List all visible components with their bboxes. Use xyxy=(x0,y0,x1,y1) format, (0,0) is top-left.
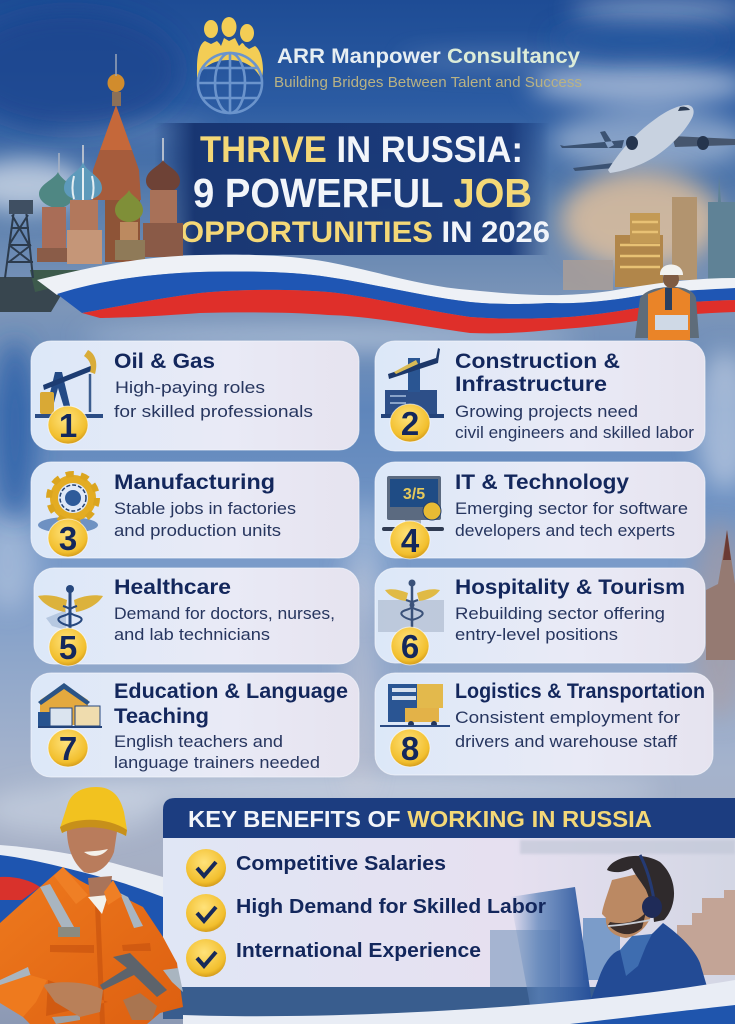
hard hat xyxy=(60,787,127,836)
description: Emerging sector for software xyxy=(455,499,688,518)
benefit 1 xyxy=(186,849,446,887)
benefit 2: High Demand for Skilled Labor xyxy=(236,896,546,918)
description xyxy=(114,378,313,421)
badge 1 xyxy=(48,406,88,444)
description: Demand for doctors, nurses, xyxy=(114,604,335,623)
call-centre agent xyxy=(590,855,708,1002)
heading: Oil & Gas xyxy=(114,350,215,373)
icon: airplane xyxy=(560,105,735,173)
small engineer with clipboard xyxy=(635,264,699,340)
heading: Infrastructure xyxy=(455,373,607,396)
green dome xyxy=(115,190,143,222)
icon: truck and warehouse xyxy=(380,684,450,727)
faint skyline in panel xyxy=(490,890,735,987)
central tower xyxy=(105,190,140,262)
badge 5 xyxy=(49,628,87,666)
panel: key benefits xyxy=(163,798,735,1019)
right dome xyxy=(162,138,164,162)
collar xyxy=(54,867,122,905)
description xyxy=(114,499,296,540)
title: OPPORTUNITIES IN 2026 xyxy=(180,216,550,249)
badge 3: 3 xyxy=(59,520,77,557)
description xyxy=(455,604,665,644)
badge 7: 7 xyxy=(59,730,77,767)
heading xyxy=(455,350,620,396)
icon: monitor xyxy=(382,476,444,531)
heading: Manufacturing xyxy=(114,471,275,494)
card 6: Hospitality & Tourism xyxy=(375,568,705,665)
card 7: Education & Language Teaching xyxy=(31,673,359,777)
card 8: Logistics & Transportation xyxy=(375,673,713,775)
heading: Hospitality & Tourism xyxy=(455,576,685,599)
badge 7 xyxy=(48,729,88,767)
description: developers and tech experts xyxy=(455,521,675,540)
description: English teachers and xyxy=(114,732,283,751)
badge 8 xyxy=(390,729,430,767)
description: and lab technicians xyxy=(114,625,270,644)
cloud band at top right of panel xyxy=(520,840,735,854)
description: Stable jobs in factories xyxy=(114,499,296,518)
description: High-paying roles xyxy=(115,378,265,397)
heading xyxy=(114,680,348,728)
city skyline xyxy=(563,175,735,290)
company name: ARR Manpower Consultancy xyxy=(277,44,580,68)
benefit 3 xyxy=(186,939,481,977)
description: civil engineers and skilled labor xyxy=(455,423,694,442)
badge 4 xyxy=(390,521,430,559)
icon: school and books xyxy=(38,683,102,728)
oil derrick and base xyxy=(0,200,85,312)
description: drivers and warehouse staff xyxy=(455,732,677,751)
face xyxy=(67,825,118,873)
icon: monitor: 3/5 xyxy=(403,486,425,503)
description: and production units xyxy=(114,521,281,540)
card 1: Oil & Gas xyxy=(31,341,359,450)
construction worker xyxy=(0,787,183,1024)
lower city band xyxy=(163,987,735,1019)
card 4: IT & Technology xyxy=(375,462,705,559)
description xyxy=(114,604,335,644)
badge 8: 8 xyxy=(401,730,419,767)
description xyxy=(455,402,694,442)
icon: crane and platform xyxy=(381,348,444,418)
heading: Construction & xyxy=(455,350,620,373)
icon: caduceus xyxy=(38,585,103,630)
description xyxy=(114,732,320,772)
panel body xyxy=(163,838,735,987)
panel header xyxy=(163,798,735,838)
title panel xyxy=(155,123,549,255)
pocket and arm shading xyxy=(46,905,151,1024)
heading: Education & Language xyxy=(114,680,348,703)
heading: Logistics & Transportation xyxy=(455,680,705,703)
logo xyxy=(197,17,582,113)
cathedral xyxy=(37,54,183,264)
badge 6 xyxy=(391,627,429,665)
left dome 1 xyxy=(58,153,60,173)
badge 4: 4 xyxy=(401,522,420,559)
icon: caduceus and hotel xyxy=(378,580,444,632)
card 5: Healthcare xyxy=(34,568,359,666)
benefit 3: International Experience xyxy=(236,940,481,962)
description xyxy=(455,708,680,751)
benefit 2 xyxy=(186,894,546,932)
title: THRIVE IN RUSSIA: xyxy=(200,129,523,170)
icon: pump jack xyxy=(35,350,103,418)
badge 1: 1 xyxy=(59,407,77,444)
badge 5: 5 xyxy=(59,629,77,666)
title xyxy=(180,129,550,249)
panel heading: KEY BENEFITS OF WORKING IN RUSSIA xyxy=(188,806,652,832)
tagline: Building Bridges Between Talent and Success xyxy=(274,75,582,91)
description: Growing projects need xyxy=(455,402,638,421)
left hand xyxy=(43,982,103,1017)
coverall xyxy=(0,867,183,1024)
badge 3 xyxy=(48,519,88,557)
description: Rebuilding sector offering xyxy=(455,604,665,623)
heading: Healthcare xyxy=(114,576,231,599)
description: Consistent employment for xyxy=(455,708,680,727)
card 2: Construction & Infrastructure xyxy=(375,341,705,451)
left dome 2 xyxy=(82,145,84,165)
description: language trainers needed xyxy=(114,753,320,772)
hand tool xyxy=(100,953,167,997)
badge 2 xyxy=(390,404,430,442)
icon: gear xyxy=(38,474,98,533)
badge 2: 2 xyxy=(401,405,419,442)
left flag behind worker xyxy=(0,845,163,945)
description xyxy=(455,499,688,540)
heading: IT & Technology xyxy=(455,471,629,494)
right hand xyxy=(123,993,157,1020)
Russian flag ribbon xyxy=(37,255,735,333)
left sleeve xyxy=(0,975,47,1017)
neck and shirt xyxy=(88,876,112,912)
description: entry-level positions xyxy=(455,625,618,644)
bottom white wave xyxy=(183,980,735,1024)
reflective strips xyxy=(0,884,183,998)
title: 9 POWERFUL JOB xyxy=(193,170,532,216)
heading: Teaching xyxy=(114,705,209,728)
benefit 1: Competitive Salaries xyxy=(236,853,446,875)
description: for skilled professionals xyxy=(114,402,313,421)
distant red tower, right edge xyxy=(706,530,735,660)
badge 6: 6 xyxy=(401,628,419,665)
card 3: Manufacturing xyxy=(31,462,359,558)
icon: three people xyxy=(197,17,263,80)
monitor xyxy=(510,887,592,1005)
icon: globe xyxy=(198,53,262,113)
